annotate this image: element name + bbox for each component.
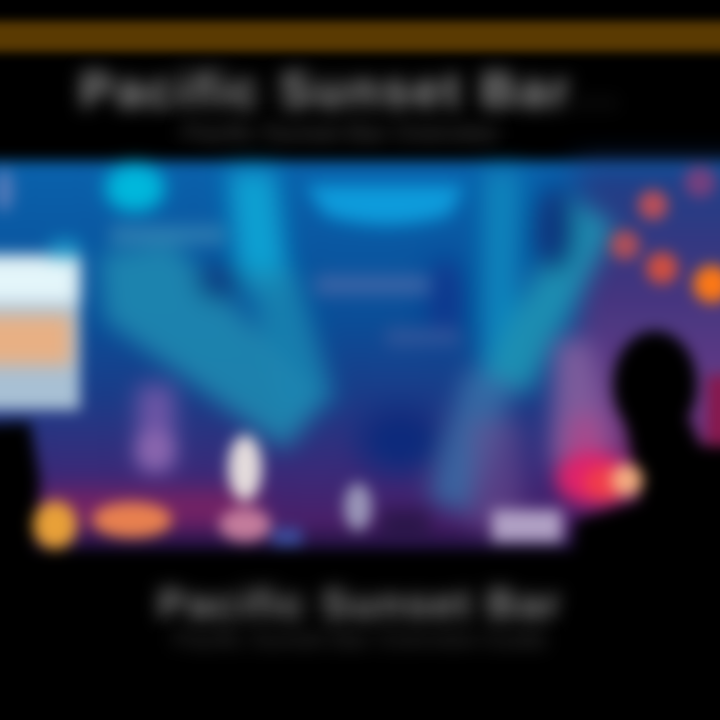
- bottom caption: Pacific Sunset Bar Overview Guide: [173, 626, 547, 653]
- panel background: [0, 161, 720, 550]
- top accent bar: [0, 21, 720, 52]
- foreground lights: [33, 435, 562, 549]
- left bright window: [0, 240, 80, 410]
- subtitle: Pacific Sunset Bar Overview: [182, 119, 498, 147]
- dark silhouettes: [0, 331, 720, 600]
- crowd and right purple light: [137, 340, 612, 540]
- red glow: [556, 452, 643, 504]
- title: Pacific Sunset Bar...: [80, 62, 620, 118]
- bottom heading: Pacific Sunset Bar: [158, 580, 562, 627]
- light beams: [100, 170, 615, 515]
- ceiling lights and bands: [0, 164, 465, 346]
- right-side warm lights: [610, 166, 720, 445]
